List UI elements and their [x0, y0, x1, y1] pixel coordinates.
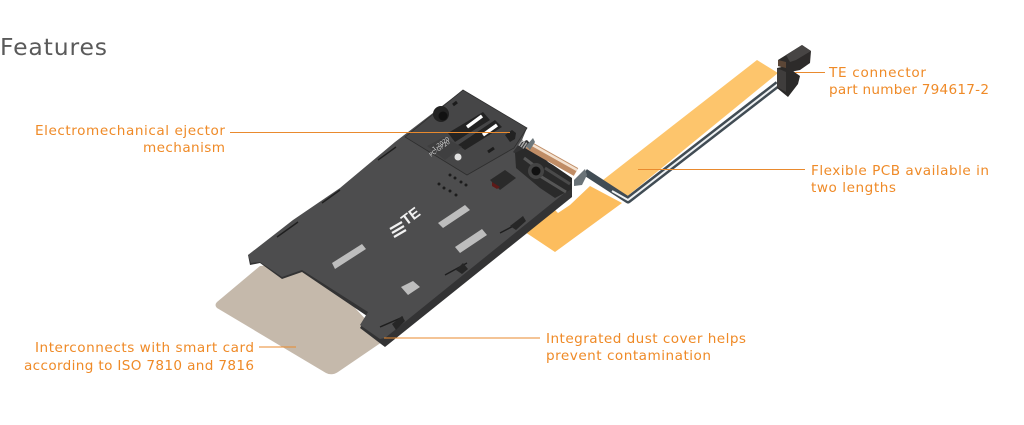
- title: Features: [0, 33, 107, 61]
- TE connector: [777, 45, 811, 97]
- part number label: PC-GP20: [429, 139, 452, 159]
- connector body top: [248, 90, 572, 339]
- callout: electromechanical ejector: [35, 123, 510, 156]
- small cover slot: [488, 148, 494, 152]
- window with red detail: [490, 170, 516, 190]
- callout: electromechanical ejector: Electromechanical ejector: [35, 123, 225, 139]
- callout: flexible PCB: [638, 163, 989, 196]
- TE logo: [390, 204, 424, 237]
- copper plunger and spring: [518, 138, 587, 186]
- part number label: [427, 136, 462, 160]
- callout: dust cover: prevent contamination: [546, 348, 711, 364]
- flexible PCB strip: [525, 60, 778, 252]
- callout: dust cover: Integrated dust cover helps: [546, 331, 746, 347]
- callout: flexible PCB: two lengths: [811, 180, 896, 196]
- callout: TE connector: part number 794617-2: [829, 82, 989, 98]
- callout: electromechanical ejector: mechanism: [143, 140, 225, 156]
- TE logo: TE: [398, 204, 424, 229]
- mounting hole: [433, 102, 457, 122]
- callout: smart card interconnect: according to ISO 7810 and 7816: [24, 358, 254, 374]
- callout: dust cover: [384, 331, 746, 364]
- side clips: [277, 147, 525, 327]
- mechanism channel: [515, 148, 572, 198]
- part number label: 1-2020: [432, 136, 451, 153]
- eject slots: [448, 112, 502, 150]
- label plates: [332, 205, 487, 295]
- contact dots: [438, 174, 468, 196]
- callout: TE connector: TE connector: [828, 65, 926, 81]
- connector body side: [248, 140, 572, 347]
- ejector cover plate: [405, 90, 527, 175]
- callout: smart card interconnect: [24, 340, 296, 374]
- callout: smart card interconnect: Interconnects with smart card: [35, 340, 254, 356]
- callout: TE connector: [795, 65, 989, 98]
- callout: flexible PCB: Flexible PCB available in: [811, 163, 989, 179]
- ejector latch: [505, 130, 516, 142]
- smart card: [216, 262, 385, 374]
- product illustration: smart card connector: [216, 45, 811, 374]
- flat cable: [585, 84, 778, 200]
- clip recesses: [392, 216, 526, 330]
